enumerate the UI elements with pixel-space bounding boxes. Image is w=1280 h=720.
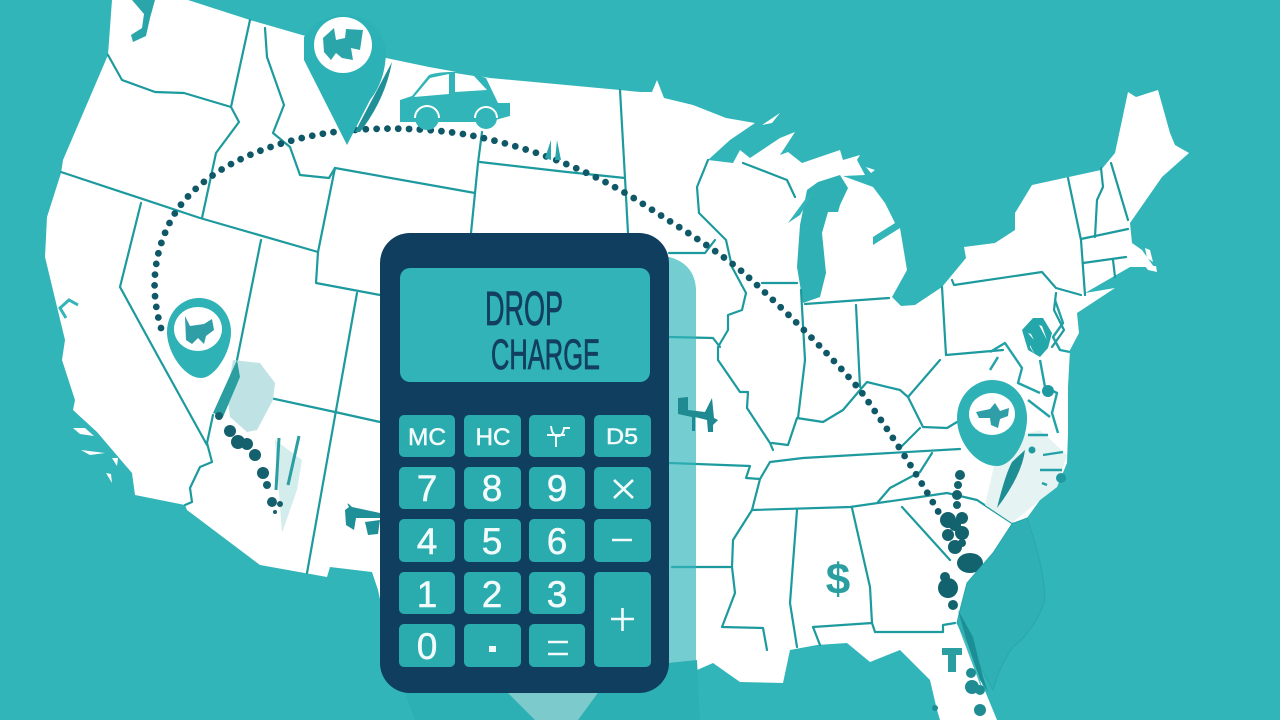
pin shadow stripe xyxy=(997,450,1025,508)
pin glyph xyxy=(185,316,214,344)
key row 2 xyxy=(399,467,651,509)
key row 4: 1 xyxy=(417,574,437,615)
pin: east xyxy=(957,300,1070,523)
dark beads xyxy=(215,412,283,514)
teal trail strokes xyxy=(276,436,299,490)
green bay xyxy=(788,193,813,223)
key row 3 xyxy=(399,519,651,562)
pale sliver xyxy=(275,440,302,533)
shadow right of calculator xyxy=(665,256,696,680)
lake islands xyxy=(762,113,1157,272)
pin body xyxy=(167,298,231,378)
wheel arcs xyxy=(415,106,497,118)
key row 2: 8 xyxy=(482,468,502,509)
leaf shadow sliver xyxy=(958,610,988,692)
pale wash xyxy=(227,360,275,432)
key row 1 xyxy=(399,415,651,457)
car wheels xyxy=(415,106,439,130)
pin body xyxy=(957,380,1027,466)
key row 2: 7 xyxy=(417,468,437,509)
state borders east xyxy=(669,160,1128,650)
pin: west xyxy=(167,298,231,378)
key row 1: HC xyxy=(476,424,510,451)
key row 4 xyxy=(399,572,585,615)
key row 5: 0 xyxy=(417,626,437,667)
bay channel and borders xyxy=(990,300,1070,485)
bay blobs xyxy=(1028,385,1066,483)
pin glyph xyxy=(976,403,1009,428)
pin shadow stripe xyxy=(355,62,392,132)
route bead cluster: southeast xyxy=(938,470,983,610)
keypad xyxy=(399,415,651,667)
leaf pale edge xyxy=(957,623,984,695)
icon: tool right of calculator xyxy=(678,397,718,432)
key row 3: 6 xyxy=(547,521,567,562)
pin inner circle xyxy=(174,307,222,351)
icon: car xyxy=(400,72,510,130)
display text: CHARGE: CHARGE xyxy=(491,331,600,379)
key row 1: MC xyxy=(408,424,446,451)
pin inner circle xyxy=(314,17,372,73)
icon: t-shape florida xyxy=(942,648,962,672)
key row 4: 2 xyxy=(482,574,502,615)
calculator body xyxy=(380,233,669,693)
display text: DROP: DROP xyxy=(485,283,563,336)
coast squiggle xyxy=(60,300,78,318)
key row 2: 9 xyxy=(547,468,567,509)
dotted route arc xyxy=(155,129,943,520)
california islands xyxy=(73,428,118,483)
key row 1: D5 xyxy=(606,424,638,449)
pin inner circle xyxy=(969,393,1015,435)
display screen xyxy=(400,268,650,382)
calculator xyxy=(380,233,669,693)
chesapeake holes xyxy=(1028,325,1047,355)
calculator drop shadow xyxy=(404,256,700,720)
car body xyxy=(400,72,510,122)
arizona trail xyxy=(213,360,302,533)
shadow below calculator xyxy=(404,660,700,720)
key row 3: 4 xyxy=(417,521,437,562)
icon: tool left of calculator xyxy=(345,504,380,535)
leaf body xyxy=(957,518,1045,690)
car windows xyxy=(414,73,487,97)
route beads: florida xyxy=(932,668,986,716)
shadow pointer xyxy=(505,690,600,720)
key row 3: 5 xyxy=(482,521,502,562)
pin stripe xyxy=(213,360,240,417)
pin: north xyxy=(304,15,392,145)
key row 4: 3 xyxy=(547,574,567,615)
plus key xyxy=(594,572,651,667)
icon: tick marks montana xyxy=(545,140,561,160)
big teal leaf, southeast coast xyxy=(957,518,1045,695)
key row 5 xyxy=(399,624,585,667)
lake michigan xyxy=(797,175,848,303)
chesapeake bay xyxy=(1022,318,1052,357)
pin body xyxy=(304,15,386,145)
pin glyph xyxy=(323,28,363,60)
icon: dollar sign: $ xyxy=(826,555,850,604)
state borders west xyxy=(61,20,628,573)
pale wash xyxy=(985,430,1067,523)
icon: wrench fragment washington xyxy=(131,0,155,42)
